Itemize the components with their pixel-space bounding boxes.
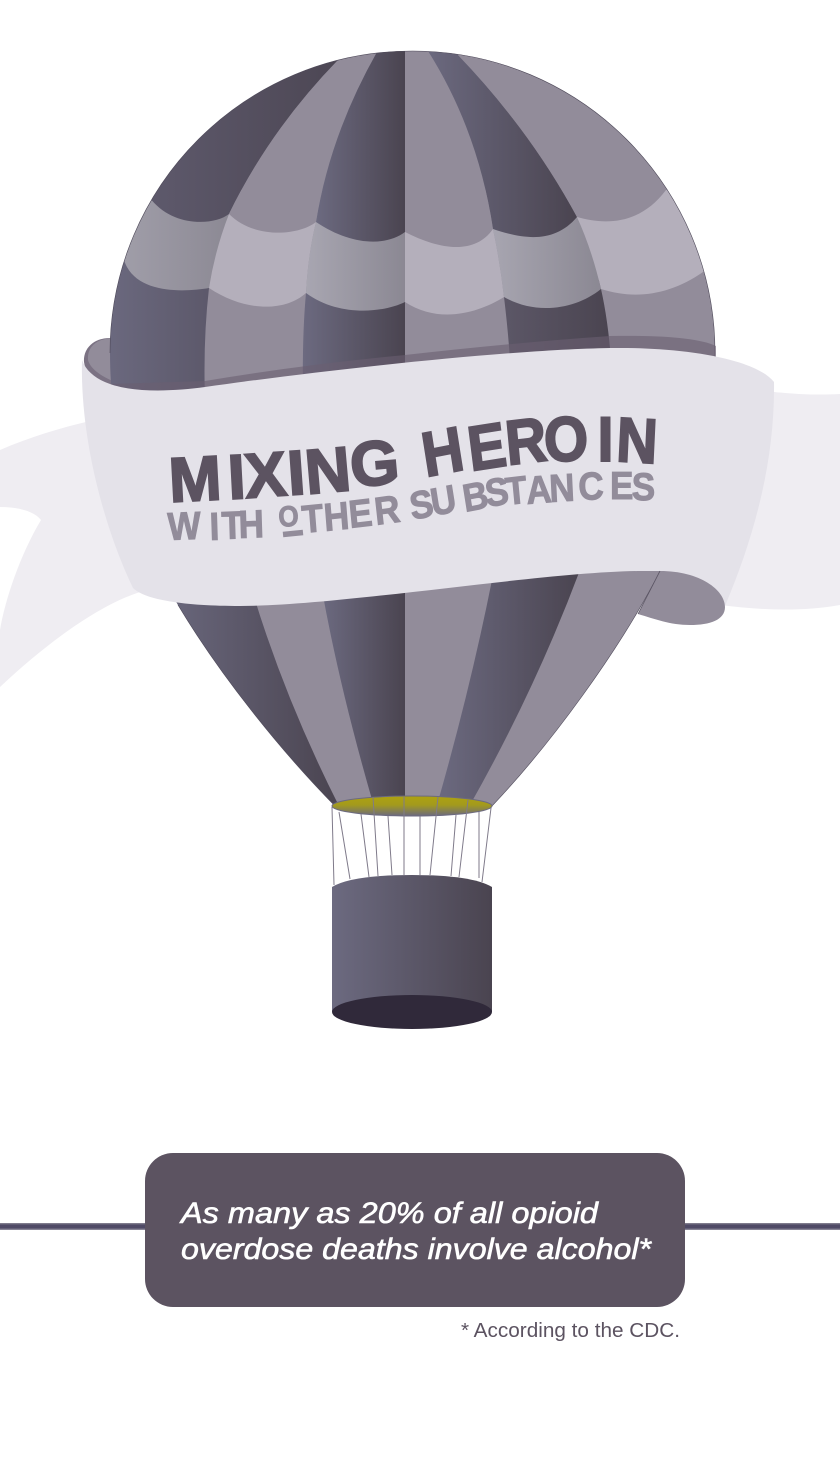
callout text: overdose deaths involve alcohol* (181, 1233, 652, 1266)
ribbon tail: left (0, 421, 140, 687)
underline below O (283, 532, 303, 534)
lower tier panels (110, 262, 610, 390)
subheading: with other substances: WITH OTHER SUBSTANCES (167, 463, 655, 548)
banner right fold (638, 571, 725, 625)
hot air balloon envelope (80, 40, 725, 820)
ribbon shadow strip (110, 336, 716, 396)
callout text: As many as 20% of all opioid (179, 1197, 599, 1230)
bottom gores (176, 574, 578, 804)
footnote: * According to the CDC. (461, 1320, 680, 1342)
balloon mouth (332, 796, 492, 816)
callout box (145, 1153, 685, 1307)
heading: mixing heroin: HEROIN (417, 403, 659, 490)
horizontal rule (0, 1223, 840, 1230)
callout (145, 1153, 685, 1307)
balloon ropes (332, 797, 491, 885)
main banner (82, 348, 774, 606)
basket opening (332, 995, 492, 1029)
heading: mixing heroin (167, 403, 659, 516)
middle tier panels (80, 190, 720, 315)
heading: mixing heroin: MIXING (167, 427, 402, 516)
basket body (332, 875, 492, 1012)
background ribbon (0, 391, 840, 687)
basket (332, 875, 492, 1029)
ribbon rear fold (84, 338, 125, 390)
top tier panels (152, 51, 666, 247)
ribbon tail: right (720, 391, 840, 610)
